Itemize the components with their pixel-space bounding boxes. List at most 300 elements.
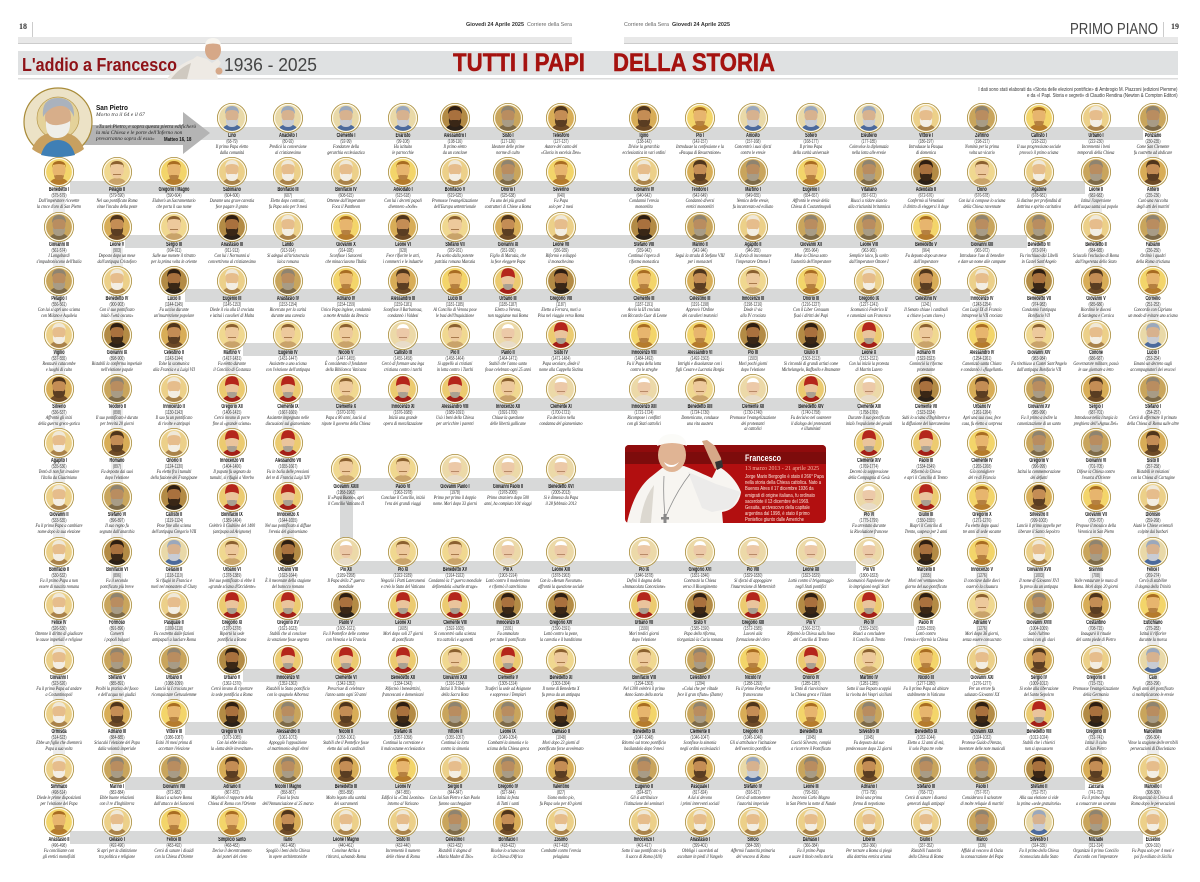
pope: Lando: (913-914) [280,248,296,254]
pope: Benedetto XI: Il nome di Benedetto X [543,686,579,692]
pope: Giovanni VIII: Riuscì a salvare Roma [156,795,192,801]
pope: Gregorio IV: Istituì la festa [497,795,519,801]
pope: Agapito II: Agapito II [745,242,761,248]
pope: Giovanni Paolo II: Giovanni Paolo II [493,484,523,490]
San Pietro quote: «Tu sei Pietro, e sopra questa pietra edificherò [96,124,196,130]
pope: Damaso II: Damaso II [552,729,570,735]
pope: Gregorio VIII: Eletto a Ferrara, morì a [541,307,581,313]
pope: Sabiniano: Durante una grave carestia [210,198,254,204]
pope: Pio II: Si appellò ai cristiani [438,361,472,367]
pope: Urbano VII [604,590,684,643]
pope: Agapito I: Tentò di non far invadere [39,469,79,475]
pope: Callisto III: (1455-1458) [394,356,412,362]
pope: Pasquale II: antipapali a lasciare Roma [152,636,196,642]
pope: Urbano VII: Urbano VII [635,620,653,626]
pope: Callisto II [134,482,214,535]
pope: Clemente XI: Fu decisivo nella [547,415,575,421]
pope: Nicolò V [306,320,386,373]
pope: Eugenio II: (824-827) [636,790,652,796]
pope: Teodoro II: (898) [113,410,121,416]
pope: Gregorio IX: Gregorio IX [859,296,879,302]
pope: Benedetto XII: (1334-1342) [394,681,412,687]
pope: Adriano II: Adriano II [223,784,241,790]
pope: Pio VII [829,537,909,590]
pope: Anastasio I: Obbligò i sacerdoti ad [682,848,718,854]
pope: Vittore II: Continuò la lotta [441,740,469,746]
pope: Lino: dalla comunità [220,150,244,156]
pope: Vittore III: Esitò 10 mesi prima di [156,740,192,746]
pope: Dionisio: Dionisio [1146,512,1160,518]
pope: Ormisda: Papa a sua volta [45,746,73,752]
pope: Clemente XIV: della Compagnia di Gesù [848,474,890,480]
pope: Stefano I: della Chiesa di Roma sulle altre [1127,420,1179,426]
pope: Sabiniano: fece pagare il grano [216,204,248,210]
pope: Eugenio III: Eugenio III [223,296,241,302]
pope: Onorio II: (1124-1130) [165,464,183,470]
pope: Pio VIII: Si sforzò di appoggiare [734,578,772,584]
pope: Giovanni XI: Giovanni XI [498,242,518,248]
pope: Gregorio XVI: (1831-1846) [691,573,709,579]
pope: Gregorio IV: (827-844) [500,790,516,796]
pope: Innocenzo V: Il conclave dalle dieci [964,578,1000,584]
pope: Clemente XI: condanna del giansenismo [540,420,582,426]
pope: Leone VII: Leone VII [553,242,569,248]
pope: Marcello II: giorno del suo pontificato [905,584,947,590]
pope: Formoso [77,590,157,643]
pope: Siricio: Siricio [747,837,759,843]
pope: Vittore III: Vittore III [166,729,182,735]
pope: Adriano II [192,754,272,807]
pope: Giovanni XVIII: Sanò l'ultimo [1028,631,1050,637]
pope: Urbano VIII: È il mecenate della stagione [265,578,311,584]
pope: Agatone: Agatone [1032,187,1046,193]
pope: Giovanni II: Fu il primo Papa a cambiare [36,523,82,529]
pope: Martino V: il Concilio di Costanza [213,366,251,372]
years: 1936 - 2025 [224,55,317,75]
pope: Innocenzo XIII: Innocenzo XIII [631,404,657,410]
pope: Giovanni VI: Difese la Chiesa contro [1077,469,1115,475]
pope: Bonifacio IX: (1389-1404) [223,518,241,524]
pope: Giulio I: Ristabilì l'autorità [911,848,941,854]
pope: Leone I Magno: ritirarsi, salvando Roma [326,854,366,860]
pope: Giovanni I [19,645,99,698]
pope: Sisto II [1113,428,1193,481]
pope: Leone II: (682-683) [1088,193,1104,199]
pope: Clemente V: (1305-1314) [499,681,517,687]
pope: Giulio II: Giulio II [804,350,818,356]
pope: Gregorio I Magno: (590-604) [166,193,182,199]
pope: Paolo V: Fu il Pontefice delle contese [323,631,369,637]
pope: Adriano I: forma di nepotismo [853,800,885,806]
pope: Stefano IX [363,699,443,752]
pope: Benedetto VIII: non si sposassero [1025,746,1053,752]
pope: Bonifacio V [432,157,478,210]
pope: Gregorio VIII: Gregorio VIII [550,296,572,302]
pope: Paolo V: Paolo V [339,620,353,626]
pope: Vittore I [909,103,943,156]
pope: Adriano V [942,590,1022,643]
pope: Gregorio X [942,482,1022,535]
pope: Benedetto XIV: Fu decisivo nel sostenere [791,415,831,421]
pope: Gregorio XI: Gregorio XI [222,620,242,626]
date line left [466,22,573,28]
pope: Marino II [660,212,740,265]
pope: Marcello I: (308-309) [1145,790,1161,796]
pope: Innocenzo IV: Con Luigi IX di Francia [962,307,1002,313]
pope: Paolo I: Paolo I [976,784,988,790]
pope: Vittore III: accettare l'elezione [158,746,189,752]
pope: Gregorio I Magno: che porta il suo nome [157,204,191,210]
pope: Gregorio XII [192,374,272,427]
pope: Pio VIII: l'insurrezione di Metternich [731,584,775,590]
pope: Giovanni X: che minacciavano l'Italia [326,258,366,264]
pope: Onorio I: Fu uno dei più grandi [490,198,526,204]
pope: Sotero [792,103,830,156]
pope: Innocenzo XI: Innocenzo XI [392,404,414,410]
pope: Giovanni VIII: Giovanni VIII [163,784,185,790]
pope: Costantino: del santo piede di Pietro [1076,636,1116,642]
pope: Paolo III: (1534-1549) [917,464,935,470]
pope: Marcello II [886,537,966,590]
pope: Clemente VI [306,645,386,698]
pope: Marino I: Ebbe buone relazioni [100,795,134,801]
pope: Pio VI: la Rivoluzione francese [850,528,888,534]
pope: Silvestro III: Fu deposto dal suo [854,740,884,746]
pope: Conone: Conone [1089,350,1103,356]
pope: Eugenio I [791,157,831,210]
page number right: 19 [1171,22,1179,31]
pope: Adriano III: (884-885) [109,735,125,741]
pope: Urbano I: Urbano I [1088,133,1104,139]
pope: Vittore II: contro la simonia [441,746,469,752]
pope: Pio X [468,537,548,590]
pope: Marino I: con il re d'Inghilterra [100,800,134,806]
pope: Sergio I [1056,374,1136,427]
pope: Celestino IV [886,266,966,319]
pope: Paolo IV: (1555-1559) [917,626,935,632]
pope: Ponziano [1134,103,1172,156]
pope: Giulio III: Riaprì il Concilio di [910,523,942,529]
pope: Giovanni XXI: salutato Giovanni XX [965,692,999,698]
pope: Dono: della Chiesa ravennate [963,204,1001,210]
pope: Sergio I: Introdusse nella liturgia la [1075,415,1117,421]
pope: Alessandro II: Alessandro II [276,729,300,735]
pope: Celestino V: fece il gran rifiuto» (Dante) [678,692,722,698]
pope: Benedetto IX: a ricorrere il Pontificato [791,746,831,752]
pope: Eugenio I: Eugenio I [803,187,819,193]
pope: Alessandro VII [248,428,328,481]
pope: Ilario: in opere architettoniche [269,854,307,860]
pope: Pio VIII: (1829-1830) [744,573,762,579]
pope: Simmaco: Diede le prime disposizioni [37,795,81,801]
pope: Alessandro VII: (1655-1667) [279,464,297,470]
pope: Eusebio: Fu Papa solo per 4 mesi e [1132,848,1174,854]
pope: Benedetto VIII [999,699,1079,752]
pope: Bonifacio II: (530-532) [51,573,67,579]
pope: Clemente II: Sconfisse la simonia [684,740,716,746]
pope: Clemente I [327,103,365,156]
pope: Marcello I: Roma dopo le persecuzioni [1131,800,1175,806]
pope: Marco: Affidò al vescovo di Ostia [961,848,1003,854]
pope: Stefano IX: il malcostume ecclesiastico [381,746,425,752]
pope: Leone XIII: (1878-1903) [552,573,570,579]
pope: Aniceto: Concentrò i suoi sforzi [735,144,771,150]
pope: Siricio: (384-399) [745,843,761,849]
pope: Innocenzo XIII: (1721-1724) [635,410,653,416]
pope: Adeodato I: (615-618) [395,193,411,199]
pope: Giovanni III: I Longobardi [48,253,70,259]
pope: Giovanni VII: Veronica in San Pietro [1078,528,1114,534]
pope: Stefano III: generati dagli antipapi [907,800,945,806]
pope: Gregorio XIV: Lottò contro la peste, [544,631,578,637]
pope: Eugenio III: (1145-1153) [223,302,241,308]
pope: Sergio III: Sulle sue monete il ritratto [153,253,195,259]
pope: Paolo II [468,320,548,373]
pope: Innocenzo IV: intraprese la VII crociata [962,312,1002,318]
pope: Giovanni Paolo II: Primo straniero dopo 500 [487,495,529,501]
pope: Romano: Fu deposto dai suoi [101,469,133,475]
pope: Adriano IV: (1154-1159) [337,302,355,308]
pope: Felice I: il dogma della Trinità [1135,584,1171,590]
pope: Celestino IV: Il Senato chiuse i cardinali [904,307,948,313]
pope: Benedetto XV: (1914-1922) [446,573,464,579]
pope: Pio VIII: Pio VIII [747,567,759,573]
pope: Teodoro I: (642-649) [692,193,708,199]
pope: Adriano VI: Adriano VI [917,350,935,356]
pope: Clemente X: Papa a 80 anni, lasciò al [326,415,366,421]
pope: Anastasio II: Fu conciliante con [44,848,74,854]
pope: Paolo V: con Venezia e la Francia [326,636,366,642]
date line left: Giovedì 24 Aprile 2025 [466,22,524,28]
pope: Gregorio XVI: Gregorio XVI [689,567,711,573]
pope: Celestino I [415,807,495,860]
pope: Felice I: Felice I [1147,567,1159,573]
pope: Giovanni VII: Giovanni VII [1085,512,1107,518]
pope: Ilario: (461-468) [280,843,296,849]
pope: Lando: Lando [282,242,294,248]
pope: Telesforo: (127-137) [553,139,569,145]
pope: Anastasio IV: Ricercato per la carità [270,307,306,313]
pope: Gregorio XV: (1621-1623) [279,626,297,632]
pope: Leone VIII: Leone VIII [860,242,878,248]
pope: Eusebio: (309-310) [1145,843,1161,849]
pope: Onorio I [484,157,532,210]
pope: Sisto V: (1585-1590) [691,626,709,632]
pope: Eugenio I: Chiesa di Costantinopoli [791,204,831,210]
pope: Evaristo: (99-108) [396,139,410,145]
pope: Anastasio II: Anastasio II [49,837,69,843]
pope: Callisto II: Pose fine allo scisma [157,523,191,529]
pope: Benedetto III: (855-858) [338,790,354,796]
pope: Giovanni XXII: Istituì il Tribunale [440,686,470,692]
pope: Giovanni XVII: Il nome di Giovanni XVI [1019,578,1059,584]
pope: Benedetto XIV [771,374,851,432]
pope: Pio II: (1458-1464) [446,356,464,362]
pope: Innocenzo VII [192,428,272,481]
pope: Leone XII: Lottò contro il brigantaggio [788,578,834,584]
pope: Leone IV: intorno al Vaticano [387,800,419,806]
pope: Nicolò I Magno: Nicolò I Magno [275,784,301,790]
pope: Nicolò IV: Nicolò IV [745,675,761,681]
pope: Urbano VI: «grande scisma d'Occidente» [208,584,256,590]
pope: Clemente III [604,266,684,319]
pope: Stefano VI: Stefano VI [108,512,126,518]
pope: Agapito I [19,428,99,481]
pope: Innocenzo I [604,807,684,860]
pope: Clemente XII: ai cattolici [744,426,762,432]
pope: Adriano III: Adriano III [108,729,126,735]
pope: Giovanni XIV: (983-984) [1031,356,1047,362]
pope: Urbano V: Cercò invano di riportare [211,686,253,692]
pope: Pio XII: Pio XII [340,567,352,573]
pope: Clemente XII [713,374,793,432]
pope: Clemente VI: Clemente VI [335,675,357,681]
pope: Pio V: (1566-1572) [802,626,820,632]
pope: Benedetto VI: Fu rinchiuso dai Libelli [1020,253,1058,259]
pope: Benedetto XIV: Benedetto XIV [798,404,824,410]
pope: Innocenzo IV [942,266,1022,319]
pope: Leone I Magno: (440-461) [338,843,354,849]
pope: Benedetto II: dall'ingerenza dello Stato [1075,258,1117,264]
pope: Silverio: Affrontò gli inizi [46,415,72,421]
pope: Nicolò V: (1447-1455) [337,356,355,362]
pope: Giovanni XXII: della Sacra Rota [441,692,469,698]
pope: Valentino: Valentino [553,784,569,790]
pope: Callisto II: Callisto II [166,512,182,518]
pope: Urbano VI: Nel suo pontificato si ebbe il [209,578,255,584]
pope: Leone XII: (1823-1829) [802,573,820,579]
pope: Stefano IV: Cercò di sottomettere [736,795,770,801]
pope: Gregorio III [1056,699,1136,752]
pope: Bonifacio IX: (antipapa ad Avignone) [213,528,251,534]
pope: Bonifacio II: essere di nascita romana [39,584,79,590]
pope: Lucio III: le basi dell'Inquisizione [436,312,474,318]
pope: Silverio: Silverio [52,404,66,410]
pope: Giovanni XVII: (1003) [1034,573,1044,579]
pope: Paolo III: Paolo III [919,458,933,464]
pope: Onorio II: della fazione dei Frangipane [151,474,197,480]
pope: Evaristo [388,103,418,156]
pope: Agatone: dottrina e spirito caritativo [1017,204,1061,210]
pope: Giulio III: Trento, sospeso per 2 anni [905,528,947,534]
pope: Innocenzo VI: Ristabilì lo Stato pontificio [266,686,310,692]
pope: Alessandro III: Alessandro III [391,296,415,302]
pope: Urbano IV: (1261-1264) [973,410,991,416]
pope: Innocenzo XII: delle libertà gallicane [490,420,526,426]
pope: Benedetto V: (964) [922,248,930,254]
pope: Giulio I: (337-352) [918,843,934,849]
pope: Sisinnio: Sisinnio [1089,567,1103,573]
pope: Benedetto III [306,754,386,807]
pope: Ponziano: (230-235) [1145,139,1161,145]
pope: Pio XI: Negoziò i Patti Lateranensi [381,578,425,584]
pope: Benedetto XV: definendola «inutile strage» [432,584,478,590]
pope: Paolo III: e aprì il Concilio di Trento [904,474,948,480]
pope: Clemente VIII: Si concentrò sulla scienza [434,631,476,637]
pope: Stefano V [77,645,157,698]
pope: Stefano II: (752-757) [1031,790,1047,796]
pope: Silvestro II: Lanciò il primo appello per [1017,523,1061,529]
pope: Alessandro III [363,266,443,319]
pope: Benedetto IX: Cacciò Silvestro, compiò [791,740,831,746]
pope: Eugenio IV: (1431-1447) [279,356,297,362]
pope: Paolo V [306,590,386,643]
pope: Benedetto XIII: Benedetto XIII [688,404,712,410]
pope: Innocenzo IX: (1591) [503,626,513,632]
pope: Benedetto XI: fu preso da un antipapa [542,692,580,698]
pope: Innocenzo IV: (1243-1254) [973,302,991,308]
pope: Clemente XIV: Decretò la soppressione [850,469,888,475]
pope: Sisinnio: (708) [1092,573,1100,579]
pope: Innocenzo I: (401-417) [636,843,652,849]
pope: Sisto V: riorganizzò la Curia romana [677,636,723,642]
pope: Clemente XIV: (1769-1774) [860,464,878,470]
pope: Adeodato II: Confermò ai Veneziani [908,198,944,204]
pope: Leone IX: (1049-1054) [499,735,517,741]
pope: Gregorio XIII: Lavorò alla [744,631,762,637]
pope: Conone: Governatore militare, passò [1073,361,1119,367]
pope: Zaccaria: (741-752) [1088,790,1104,796]
pope: Innocenzo I: il sacco di Roma (410) [626,854,662,860]
masthead and title strip [18,21,1179,80]
pope: Milziade [1056,807,1136,860]
pope: Igino: Divise la gerarchia [628,144,660,150]
pope: Lucio II: Lucio II [167,296,181,302]
pope: Benedetto XI [521,645,601,698]
pope: Pasquale II: Pasquale II [164,620,184,626]
pope: Gregorio X: Fu eletto dopo quasi [965,523,999,529]
pope: Pio X: (1903-1914) [499,573,517,579]
pope: Gregorio XVI: Contrastò la Chiesa [684,578,716,584]
pope: Stefano III: Cercò di sanare i dissensi [905,795,947,801]
pope: Giovanni VII: Propose il mosaico della [1076,523,1116,529]
pope: Silvestro III: predecessore dopo 22 giorni [846,746,892,752]
pope: Leone III: (795-816) [803,790,819,796]
pope: Bonifacio VIII: Nel 1300 celebrò il primo [623,686,665,692]
pope: Sabiniano [210,157,254,210]
pope: Leone XI: (1605) [398,626,408,632]
pope: Pio VI: (1775-1799) [860,518,878,524]
pope: Bonifacio VIII: (1294-1303) [635,681,653,687]
pope: Gregorio XII: (1406-1415) [223,410,241,416]
pope: Sisto III: Incrementò il numero [386,848,420,854]
pope: Vigilio: (537-555) [51,356,67,362]
pope: Silvestro I: riconosciuta dallo Stato [1020,854,1058,860]
pope: Innocenzo V: Innocenzo V [971,567,993,573]
pope: Leone XIII [521,537,601,590]
Francesco text: emigrati di origine italiana, fu ordinato [745,493,815,499]
pope: Stefano III: Stefano III [917,784,935,790]
pope: Silvestro II: Silvestro II [1030,512,1048,518]
pope: Teodoro I [685,157,715,210]
pope: Giovanni VIII: (872-882) [166,790,182,796]
pope: Pelagio I: con Milano e Aquileia [41,312,77,318]
Francesco text [745,452,830,524]
pope: Urbano IV: casa, fu eletto a sorpresa [962,420,1002,426]
pope: Gregorio V: dei defunti [1030,474,1048,480]
pope: Sisto IV: (1471-1484) [552,356,570,362]
pope: Callisto III [363,320,443,373]
pope: Zaccaria [1056,754,1136,807]
pope: Teodoro II: per brevità 20 giorni [100,420,134,426]
pope: Gregorio VII: Con lui ebbe inizio [217,740,247,746]
pope: Eugenio II: Eugenio II [635,784,653,790]
pope: Lucio II: Fu ucciso durante [159,307,189,313]
pope: Giovanni XI: (931-936) [500,248,516,254]
pope: Bonifacio VI: pontificato più breve [100,584,134,590]
pope: Gregorio XV: Gregorio XV [277,620,299,626]
pope: Benedetto III: dei sacramenti [334,800,358,806]
